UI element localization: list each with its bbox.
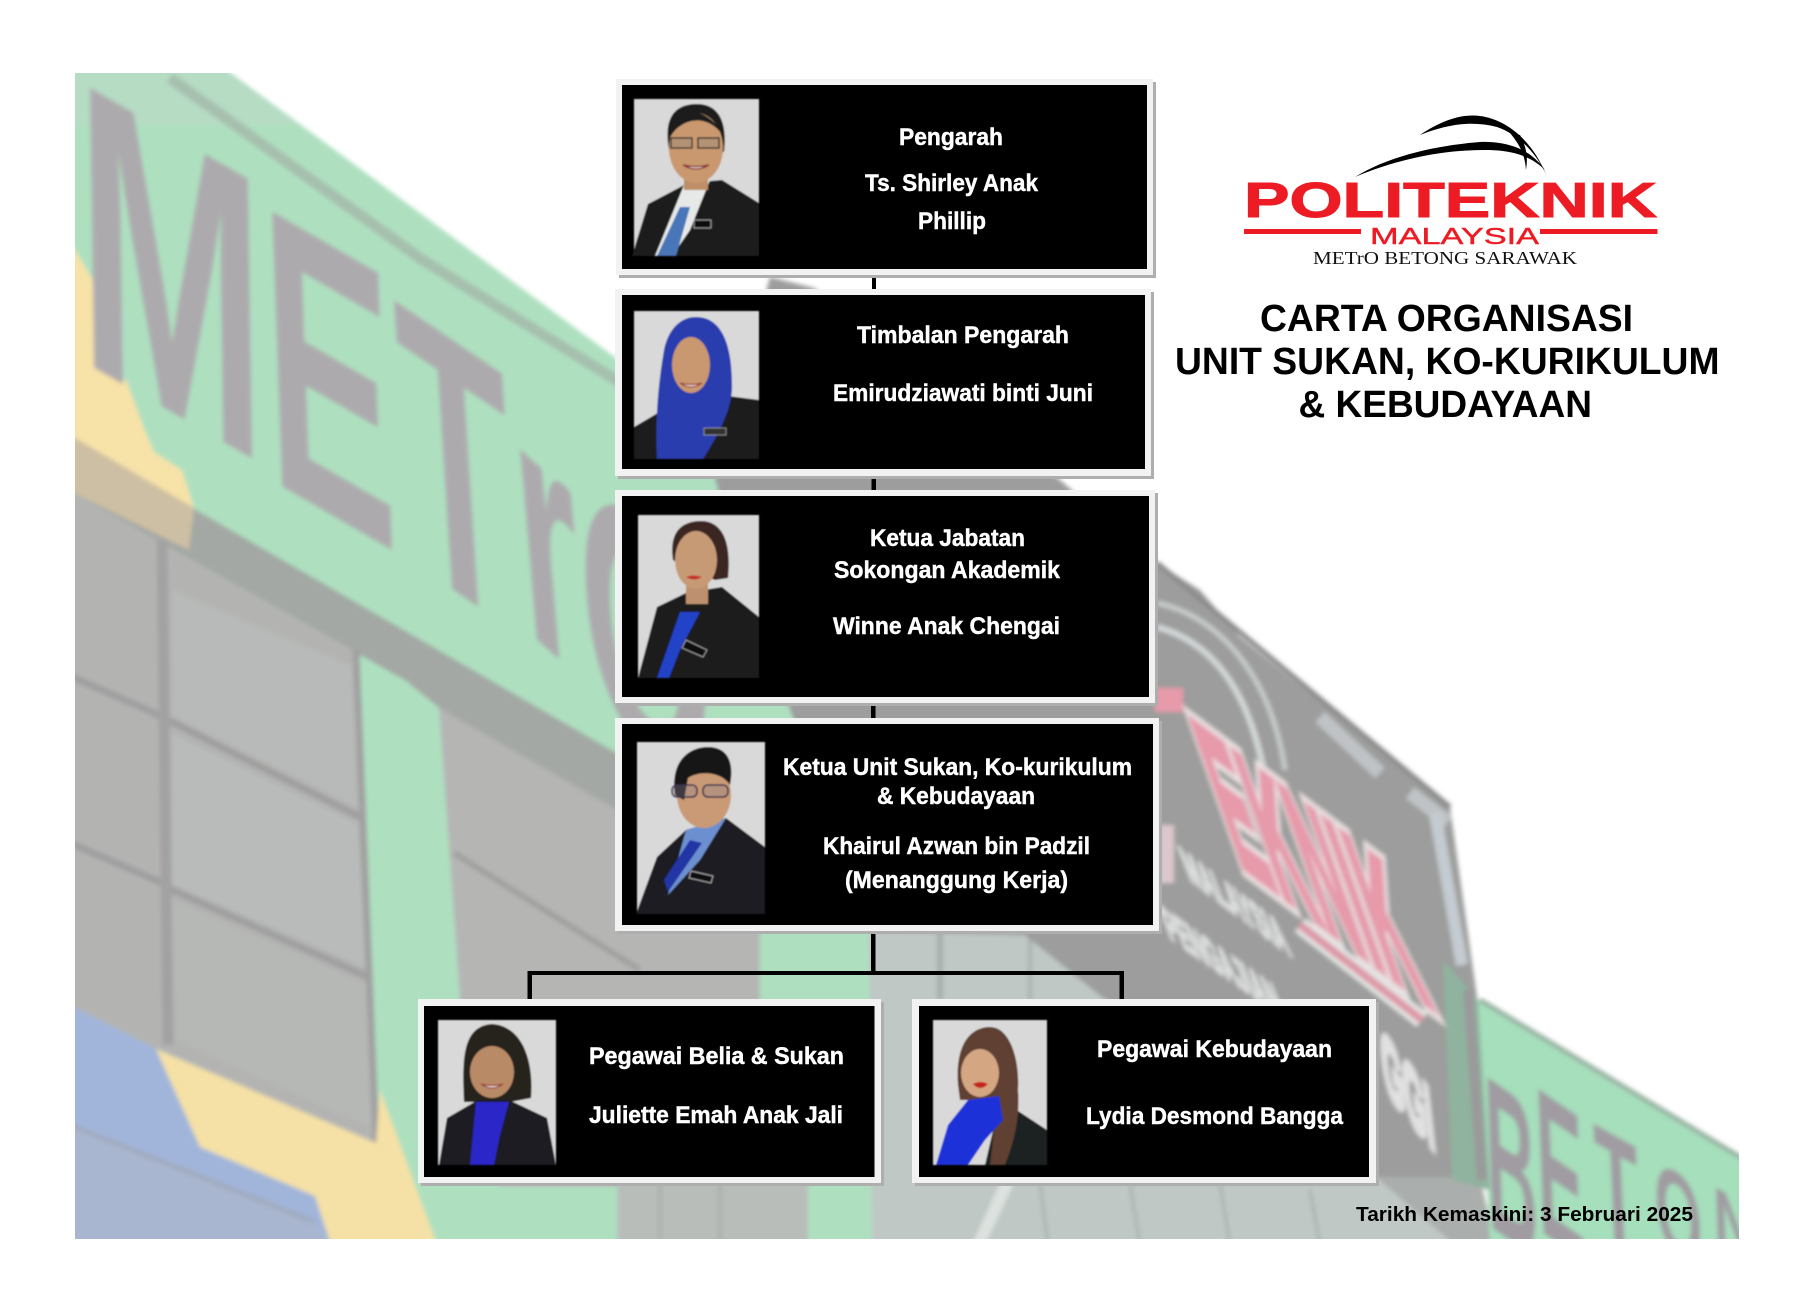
text: Ketua Unit: Ketua Unit Sukan, Ko-kurikulum: [783, 754, 1132, 781]
background photo: faded campus building: N: [1711, 1167, 1758, 1282]
text: Pengarah: Ts. Shirley Anak: [865, 170, 1039, 197]
logo: Politeknik Malaysia METrO Betong Sarawak: POLITEKNIK: [1244, 174, 1657, 228]
background photo: faded campus building: O: [568, 392, 722, 881]
text: Pegawai Belia: Juliette Emah Anak Jali: [589, 1102, 843, 1129]
panel: Timbalan Pengarah: [615, 289, 1154, 479]
background photo: faded campus building: MALAYSIA: [1172, 835, 1297, 968]
text: Timbalan Pengarah: Timbalan Pengarah: [857, 322, 1069, 349]
background photo: faded campus building: O: [1652, 1133, 1705, 1298]
portrait: Lydia: [933, 1020, 1047, 1165]
text: Pegawai Belia: [589, 1043, 844, 1129]
text: Pegawai Kebudayaan: [1086, 1036, 1344, 1130]
text: Pegawai Belia: Pegawai Belia & Sukan: [589, 1043, 844, 1070]
text: Pegawai Kebudayaan: Lydia Desmond Bangga: [1086, 1103, 1344, 1130]
text: Timbalan Pengarah: [833, 322, 1093, 407]
background photo: faded campus building: E: [1532, 1041, 1589, 1309]
panel: Pengarah: [616, 79, 1156, 278]
background photo: faded campus building: r: [497, 303, 597, 764]
text: Ketua Jabatan: Sokongan Akademik: [834, 557, 1061, 584]
portrait: Juliette: [438, 1020, 556, 1165]
background photo: faded campus building: PENGAJIAN: [1152, 893, 1291, 1030]
title: CARTA ORGANISASI: [1260, 298, 1633, 340]
title: UNIT SUKAN, KO-KURIKULUM: [1175, 341, 1720, 383]
text: Ketua Unit: (Menanggung Kerja): [845, 867, 1068, 894]
panel: Ketua Unit: [615, 718, 1162, 934]
logo: Politeknik Malaysia METrO Betong Sarawak: [1244, 116, 1658, 268]
logo: Politeknik Malaysia METrO Betong Sarawak: METrO BETONG SARAWAK: [1313, 248, 1577, 268]
background photo: faded campus building: EKNIK: [1171, 674, 1450, 1053]
background photo: faded campus building: T: [1591, 1087, 1644, 1301]
portrait: Emirudziawati: [634, 311, 759, 459]
text: Ketua Jabatan: [833, 525, 1061, 640]
panel: Pegawai Kebudayaan: [912, 999, 1379, 1186]
title: & KEBUDAYAAN: [1298, 384, 1592, 426]
text: Ketua Unit: [783, 754, 1132, 894]
title: [1175, 298, 1720, 426]
portrait: Winne: [638, 515, 759, 678]
background photo: faded campus building: M: [74, 0, 269, 554]
portrait: Khairul: [636, 742, 765, 914]
text: Pengarah: Phillip: [918, 208, 986, 235]
text: Ketua Unit: & Kebudayaan: [877, 783, 1035, 810]
connector lines: [528, 277, 1124, 1000]
panel: Pegawai Belia & Sukan: [418, 999, 884, 1186]
text: Ketua Unit: Khairul Azwan bin Padzil: [823, 833, 1090, 860]
text: Ketua Jabatan: Winne Anak Chengai: [833, 613, 1060, 640]
text: Pengarah: [865, 124, 1039, 235]
background photo: faded campus building: E: [256, 117, 403, 640]
text: Ketua Jabatan: Ketua Jabatan: [870, 525, 1025, 552]
background photo: faded campus building: GGI: [1376, 1010, 1439, 1173]
text: Timbalan Pengarah: Emirudziawati binti Juni: [833, 380, 1093, 407]
background photo: faded campus building: T: [386, 218, 527, 718]
footer date: Tarikh Kemaskini: 3 Februari 2025: [1356, 1204, 1693, 1226]
panel: Ketua Jabatan: [615, 490, 1158, 706]
portrait: Shirley: [632, 99, 759, 256]
icon: logo black arcs: [1355, 116, 1547, 177]
background photo: faded campus building: B: [1481, 1025, 1542, 1308]
logo: Politeknik Malaysia METrO Betong Sarawak: MALAYSIA: [1370, 223, 1540, 249]
text: Pengarah: Pengarah: [899, 124, 1003, 151]
background photo: faded campus building: EKNIK: [1171, 674, 1450, 1053]
text: Pegawai Kebudayaan: Pegawai Kebudayaan: [1097, 1036, 1332, 1063]
